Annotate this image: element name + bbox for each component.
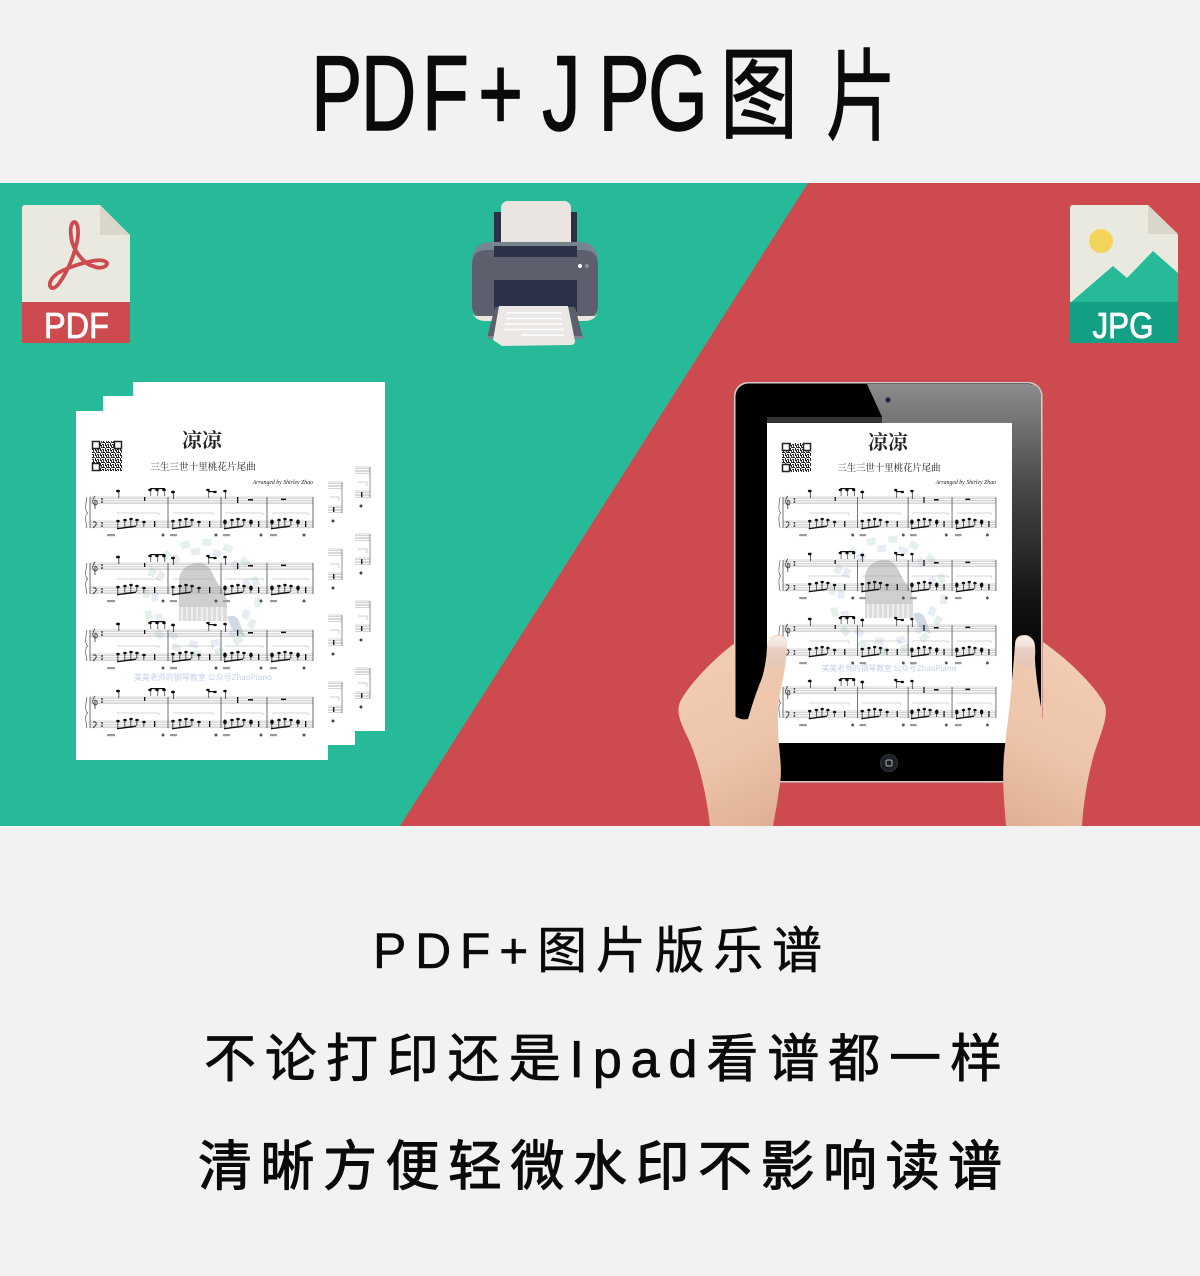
right hand	[1003, 635, 1106, 826]
caption line 3: 清晰方便轻微水印不影响读谱	[198, 1137, 1002, 1197]
watermark caption: 美美老师的钢琴教室 公众号ZhaoPiano	[822, 663, 957, 674]
music system 4	[779, 678, 996, 726]
glossy reflection	[867, 384, 1041, 720]
left hand	[678, 635, 787, 826]
caption line 1: PDF+图片版乐谱	[373, 923, 822, 979]
panel: red background	[400, 183, 1200, 826]
middle sheet	[103, 396, 355, 745]
home button	[880, 754, 898, 772]
icon: JPG file: JPG	[1092, 305, 1154, 346]
status bar	[767, 417, 1012, 423]
music system 3	[779, 616, 996, 664]
QR code	[92, 441, 122, 471]
song subtitle: 三生三世十里桃花片尾曲	[837, 462, 941, 474]
QR code	[782, 443, 811, 472]
back sheet	[133, 382, 385, 731]
caption line 2: 不论打印还是Ipad看谱都一样	[204, 1031, 1002, 1089]
song title: 凉凉	[868, 431, 910, 454]
music system 2	[86, 554, 313, 602]
music system 2	[779, 551, 996, 600]
title: PDF+JPG	[311, 34, 708, 153]
camera	[886, 398, 890, 402]
music system 3	[86, 621, 313, 670]
screen	[767, 417, 1012, 743]
music system 1	[86, 488, 313, 536]
icon: PDF file	[22, 205, 130, 346]
icon: printer	[472, 201, 598, 346]
panel: green background	[0, 183, 1200, 826]
front sheet	[76, 411, 328, 760]
watermark caption: 美美老师的钢琴教室 公众号ZhaoPiano	[134, 672, 272, 683]
song title: 凉凉	[182, 429, 224, 452]
tablet body	[734, 382, 1042, 782]
arranger credit: Arranged by Shirley Zhao	[252, 480, 313, 486]
title: 图	[720, 41, 798, 152]
title: 片	[826, 43, 896, 154]
thumbnail	[1015, 636, 1035, 668]
watermark	[832, 539, 944, 651]
arranger credit: Arranged by Shirley Zhao	[935, 480, 996, 486]
icon: JPG file	[1070, 205, 1178, 346]
watermark	[146, 542, 258, 654]
thumbnail	[767, 636, 787, 668]
title	[311, 34, 896, 154]
song subtitle: 三生三世十里桃花片尾曲	[150, 461, 256, 473]
panel: stacked paper sheets	[76, 382, 385, 760]
music system 1	[779, 488, 996, 536]
music system 4	[86, 688, 313, 736]
tablet	[734, 382, 1042, 782]
icon: PDF file: PDF	[44, 305, 109, 346]
